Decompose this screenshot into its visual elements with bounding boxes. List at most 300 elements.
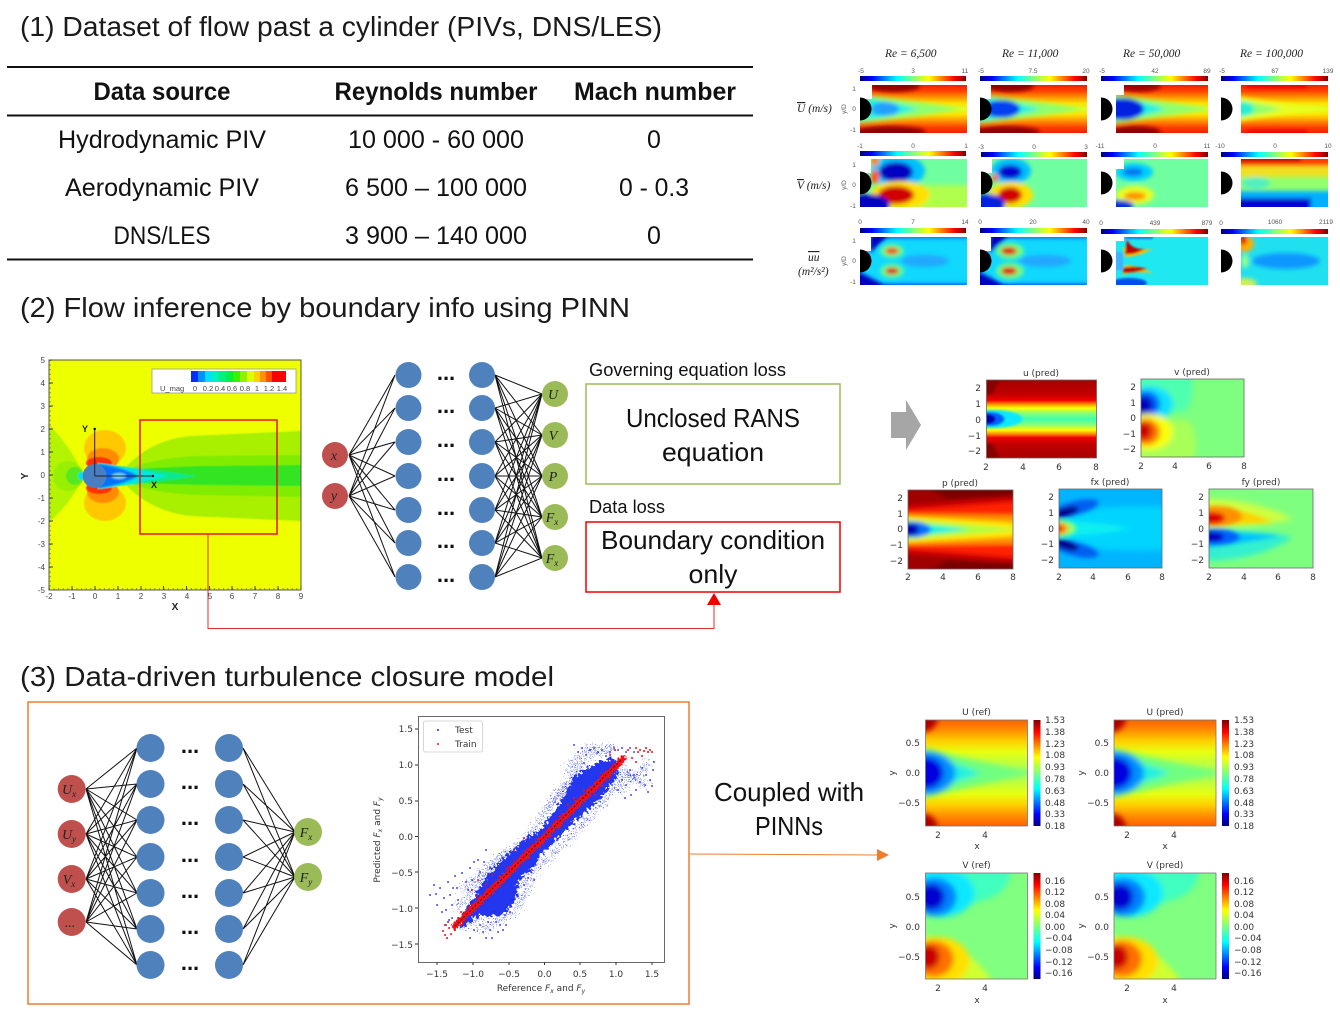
chart: fx pred: 2 [1048,493,1054,503]
frame and ticks [49,360,301,590]
chart: U ref: 0.78 [1045,775,1065,785]
table: data sources: Mach number [574,78,736,106]
chart: fx pred [1041,478,1171,583]
chart: V ref: −0.16 [1045,969,1073,979]
chart: V pred: 0.00 [1234,923,1254,933]
ellipses between layers: ... [181,769,199,794]
chart: U ref: 0.93 [1045,763,1065,773]
box: boundary condition only: only [688,559,738,589]
y axis labels: and [373,806,383,829]
colorbars: 0 [1032,144,1036,151]
chart: fx pred: 0 [1048,525,1054,535]
chart: V ref: 0.12 [1045,888,1065,898]
legend: Test [454,726,473,736]
arrow: orange to result panels [690,849,889,861]
chart: V ref: 0.00 [1045,923,1065,933]
ellipses between layers: ... [437,393,455,418]
chart: v pred: 0 [1130,414,1136,424]
colorbars: 3 [1084,144,1088,151]
chart: U ref: U (ref) [962,708,991,718]
legend: 1 [255,384,259,393]
chart: U pred: 1.23 [1234,740,1254,750]
heading: section 2: (2) Flow inference by boundary info using PINN [20,292,630,323]
chart: p pred: 1 [897,510,903,520]
column titles: Re = 11,000 [1001,48,1059,60]
colorbars: -5 [978,68,984,75]
colorbars: 20 [1029,219,1037,226]
legend: 0.2 [203,384,213,393]
chart: V ref: −0.12 [1045,958,1073,968]
chart: U pred: −0.5 [1087,799,1109,809]
x axis labels: x [549,988,554,995]
row labels [797,86,856,286]
x axis labels: -1 [68,592,76,601]
red data region rectangle [140,420,277,534]
table: data sources: 3 900 – 140 000 [345,222,527,250]
colorbars: -3 [978,144,984,151]
x axis labels: 0.5 [573,970,587,980]
text: coupled with PINNs [714,777,864,841]
chart: V pred: 0.12 [1234,888,1254,898]
x axis labels [426,962,659,995]
label: data loss: Data loss [589,497,665,517]
ellipses between layers: ... [437,427,455,452]
x axis labels: 2 [139,592,144,601]
y axis labels: −1.0 [391,905,413,915]
colorbars: 2119 [1319,219,1333,226]
body axes: X [151,480,157,490]
chart: V ref: 0.5 [906,893,920,903]
row labels: y/D [841,104,848,114]
ellipses between layers: ... [437,562,455,587]
colorbars: 7.5 [1028,68,1038,75]
legend [424,721,482,752]
chart: v pred: −2 [1123,445,1136,455]
chart: fy pred: −2 [1191,556,1204,566]
chart: V pred: −0.5 [1087,953,1109,963]
chart: fx pred: 4 [1090,573,1096,583]
chart: U ref: 0.33 [1045,810,1065,820]
x axis labels: 1.0 [609,970,623,980]
row labels: -1 [850,203,856,210]
y axis labels: −0.5 [391,869,413,879]
legend: 0 [193,384,197,393]
chart: u pred: −2 [968,447,981,457]
chart: V pred: 0.16 [1234,877,1254,887]
chart: u pred: u (pred) [1023,369,1059,379]
arrow: gray block [891,400,921,450]
chart: fx pred: 6 [1125,573,1131,583]
chart: p pred: 2 [905,573,911,583]
chart: u pred: 4 [1020,463,1026,473]
chart: V pred: 4 [1171,984,1177,994]
heatmap: U at Re 6500 [860,85,967,133]
colorbars: 439 [1150,220,1161,227]
table: data sources: 0 - 0.3 [619,174,689,202]
chart: V ref: 4 [982,984,988,994]
y axis labels [373,725,418,951]
colorbars: 89 [1203,68,1211,75]
ellipses between layers: ... [437,528,455,553]
chart: fy pred: −1 [1191,540,1204,550]
x axis labels: 1 [116,592,121,601]
hidden layers [136,734,243,979]
legend: U_mag [160,384,184,393]
chart: V ref: 0.08 [1045,900,1065,910]
x axis labels: 0 [93,592,98,601]
chart: U pred: 0.0 [1095,769,1109,779]
chart: u pred: 2 [983,463,989,473]
body axes: Y [82,424,88,434]
y axis labels: -5 [38,586,46,595]
row labels: 0 [852,258,856,265]
chart: V pred: 0.0 [1095,923,1109,933]
chart: U pred: 0.48 [1234,799,1254,809]
chart: p pred: 6 [975,573,981,583]
colorbars: 10 [1324,143,1332,150]
colorbars: 0 [911,143,915,150]
y axis labels: 4 [41,379,46,388]
y axis labels: −1.5 [391,941,413,951]
input nodes: y [71,834,76,844]
colorbars [857,68,1334,234]
input nodes: U [62,828,72,843]
row labels: (m²/s²) [798,266,829,278]
input nodes: y [329,489,338,504]
chart: fy pred [1190,478,1316,583]
chart: V pred: −0.08 [1234,946,1262,956]
output nodes [294,818,322,891]
colorbars: 67 [1271,68,1279,75]
chart: V ref: 0.0 [906,923,920,933]
chart: U ref: 0.5 [906,739,920,749]
chart: V pred: −0.04 [1234,934,1262,944]
ellipses between layers: ... [437,461,455,486]
chart: fx pred: 8 [1159,573,1165,583]
colorbars: 0 [1153,143,1157,150]
ellipses between layers: ... [181,878,199,903]
chart: predicted vs reference scatter [373,716,664,995]
colorbars: 7 [911,219,915,226]
arrow: data region to boundary loss [208,534,721,628]
colorbars: 40 [1082,219,1090,226]
row labels: V (m/s) [797,180,831,192]
table: data sources [7,66,753,260]
legend: 0.6 [227,384,237,393]
chart: fy pred: 4 [1241,573,1247,583]
colorbars: -5 [858,68,864,75]
x axis labels: -2 [45,592,53,601]
colorbars: 11 [962,68,969,75]
identity line [455,759,622,926]
chart: v pred: v (pred) [1174,368,1210,378]
chart: u pred: 8 [1093,463,1099,473]
y axis labels [20,356,46,595]
chart: u pred: 1 [975,400,981,410]
chart: U pred: 1.08 [1234,751,1254,761]
output nodes: x [553,558,558,568]
input nodes: ... [65,916,75,931]
chart: V pred: 0.04 [1234,911,1254,921]
hidden layers [396,362,495,590]
column titles: Re = 50,000 [1122,48,1181,60]
chart: V pred: x [1162,996,1168,1006]
chart: U ref [888,704,1065,852]
ellipses between layers: ... [437,360,455,385]
colorbars: 0 [1099,220,1103,227]
colorbars: 0 [978,219,982,226]
ellipses between layers: ... [437,495,455,520]
chart: V pred: V (pred) [1147,861,1183,871]
chart: U ref: 0.18 [1045,822,1065,832]
x axis labels: 0.0 [537,970,552,980]
output nodes: y [307,877,312,887]
heatmap: U at Re 11000 [980,85,1087,133]
chart: p pred: −2 [890,557,903,567]
ellipses between layers: ... [181,950,199,975]
x axis labels [45,592,304,613]
chart: fx pred: −2 [1041,556,1054,566]
chart: V ref: V (ref) [962,861,991,871]
colorbars: 42 [1151,68,1159,75]
chart: v pred: 2 [1130,383,1136,393]
cylinder [83,464,107,488]
chart: fx pred: fx (pred) [1091,478,1129,488]
chart: U ref: 0.0 [906,769,920,779]
colorbars: -11 [1096,143,1105,150]
x axis labels: Reference F [497,984,550,994]
y axis labels: 0.0 [399,833,413,843]
output nodes: F [300,826,308,841]
input nodes: U [62,783,72,798]
text: coupled with PINNs: Coupled with [714,777,864,807]
chart: velocity magnitude contour around cylinder [20,356,304,613]
chart: V ref: 2 [935,984,941,994]
chart: U pred: 0.63 [1234,787,1254,797]
heatmap: V at Re 100000 [1221,159,1328,207]
y axis labels: 2 [41,425,46,434]
chart: V ref [888,861,1073,1006]
chart: V pred: 0.08 [1234,900,1254,910]
colorbars: -5 [1099,68,1105,75]
y axis labels: Y [20,472,31,479]
red train outliers [443,748,652,938]
legend: 0.8 [240,384,250,393]
colorbars: -1 [857,143,863,150]
chart: u pred: 6 [1056,463,1062,473]
chart: V ref: x [974,996,980,1006]
colorbars: 3 [911,68,915,75]
box: boundary condition only: Boundary condition [601,525,825,555]
output nodes: F [546,552,554,567]
ellipses between layers [437,360,455,587]
chart: V pred: 2 [1124,984,1130,994]
y axis labels: -1 [38,494,46,503]
y axis labels: 0 [41,471,46,480]
chart: U pred [1077,704,1254,852]
ellipses between layers: ... [181,805,199,830]
y axis labels: Predicted F [373,832,383,883]
row labels: uu [808,252,820,264]
output nodes [542,381,568,571]
chart: U ref: 1.53 [1045,716,1065,726]
text: coupled with PINNs: PINNs [755,811,823,841]
heatmap: V at Re 11000 [981,159,1087,207]
chart: u pred: −1 [968,432,981,442]
heading: section 3: (3) Data-driven turbulence closure model [20,661,554,692]
output nodes: P [548,470,558,485]
colorbars: 11 [1204,143,1211,150]
colorbars: 1060 [1268,219,1283,226]
chart: U ref: 0.63 [1045,787,1065,797]
chart: v pred: 8 [1241,462,1247,472]
y axis labels: 0.5 [399,797,413,807]
chart: U ref: 1.23 [1045,740,1065,750]
output nodes: x [553,517,558,527]
y axis labels: -4 [38,563,46,572]
input nodes: x [330,449,338,464]
chart: v pred: 1 [1130,399,1136,409]
chart: u pred [962,369,1099,473]
chart: fy pred: 2 [1206,573,1212,583]
y axis labels: 1.0 [399,761,413,771]
chart: u pred: 0 [975,416,981,426]
y axis labels: x [377,828,384,833]
heatmap: uu at Re 50000 [1101,237,1208,285]
chart: U ref: y [888,770,898,776]
column titles: Re = 100,000 [1239,48,1303,60]
output nodes: F [546,511,554,526]
legend: 0.4 [215,384,225,393]
x axis labels: −1.5 [426,970,448,980]
y axis labels: y [377,797,384,802]
chart: V ref: −0.08 [1045,946,1073,956]
x axis labels: −1.0 [462,970,484,980]
x axis labels: y [581,988,586,995]
table: data sources: Reynolds number [334,78,538,106]
legend: 1.2 [264,384,274,393]
box: unclosed RANS equation [586,384,840,484]
row labels: y/D [841,180,848,190]
x axis labels: 6 [230,592,235,601]
label: governing equation loss: Governing equation loss [589,360,786,380]
chart: v pred: 4 [1172,462,1178,472]
chart: v pred: −1 [1123,430,1136,440]
body axes [82,424,157,490]
row labels: 1 [852,238,856,245]
chart: p pred: −1 [890,541,903,551]
chart: p pred: p (pred) [942,479,978,489]
heading: section 1: (1) Dataset of flow past a cylinder (PIVs, DNS/LES) [20,11,662,42]
colorbars: 879 [1202,220,1213,227]
x axis labels: 4 [185,592,190,601]
chart: U pred: y [1077,770,1087,776]
chart: fy pred: 1 [1198,509,1204,519]
heatmap: V at Re 6500 [860,159,967,207]
chart: p pred: 4 [940,573,946,583]
chart: V ref: −0.04 [1045,934,1073,944]
chart: fy pred: 8 [1310,573,1316,583]
colorbars: 14 [961,219,969,226]
chart: V pred: −0.12 [1234,958,1262,968]
chart: V pred: 0.5 [1095,893,1109,903]
box: unclosed RANS equation: equation [662,437,764,467]
chart: U pred: x [1162,842,1168,852]
colorbars: 0 [1273,143,1277,150]
chart: fy pred: 2 [1198,493,1204,503]
heatmap: U at Re 100000 [1221,85,1328,133]
colorbars: 20 [1082,68,1090,75]
row labels: -1 [850,127,856,134]
table: data sources: DNS/LES [114,222,210,250]
x axis labels: 1.5 [645,970,659,980]
y axis labels: -2 [38,517,46,526]
chart: U pred: 0.18 [1234,822,1254,832]
x axis labels: F [576,984,582,994]
row labels: 0 [852,106,856,113]
table: data sources: Aerodynamic PIV [65,174,259,202]
chart: V pred: −0.16 [1234,969,1262,979]
PINN network diagram [322,360,568,590]
y axis labels: F [373,800,383,806]
chart: U pred: 2 [1124,831,1130,841]
legend [152,369,296,393]
chart: V pred [1077,861,1262,1006]
box: unclosed RANS equation: Unclosed RANS [626,403,800,433]
chart: u pred: 2 [975,384,981,394]
chart: U ref: 1.08 [1045,751,1065,761]
table: data sources: 0 [647,222,661,250]
chart: V ref: 0.04 [1045,911,1065,921]
x axis labels: and [554,984,576,994]
chart: V ref: 0.16 [1045,877,1065,887]
chart: U pred: 4 [1171,831,1177,841]
chart: U ref: 1.38 [1045,728,1065,738]
chart: U ref: 2 [935,831,941,841]
box: boundary condition only [586,522,840,592]
chart: U ref: 0.48 [1045,799,1065,809]
x axis labels: 8 [276,592,281,601]
input nodes: x [71,789,76,799]
row labels: y/D [841,256,848,266]
heatmap: uu at Re 100000 [1221,237,1328,285]
legend: 1.4 [277,384,287,393]
chart: U pred: 1.38 [1234,728,1254,738]
chart: U pred: 0.33 [1234,810,1254,820]
column titles [884,48,1303,60]
chart: U ref: −0.5 [898,799,920,809]
chart: V ref: y [888,923,898,929]
red train band [453,757,625,928]
panel: orange closure model box [28,702,689,1004]
heatmap: U at Re 50000 [1101,85,1208,133]
y axis labels: 5 [41,356,46,365]
chart: U ref: x [974,842,980,852]
chart: fy pred: 6 [1275,573,1281,583]
x axis labels: 5 [208,592,213,601]
chart: p pred: 2 [897,494,903,504]
chart: U pred: 1.53 [1234,716,1254,726]
chart: fy pred: fy (pred) [1242,478,1280,488]
chart: p pred: 0 [897,525,903,535]
row labels: -1 [850,279,856,286]
chart: U pred: 0.93 [1234,763,1254,773]
chart: p pred [890,479,1023,583]
table: data sources: 10 000 - 60 000 [348,126,524,154]
colorbars: 0 [858,219,862,226]
colorbars: 0 [1219,220,1223,227]
colorbars: 139 [1323,68,1334,75]
